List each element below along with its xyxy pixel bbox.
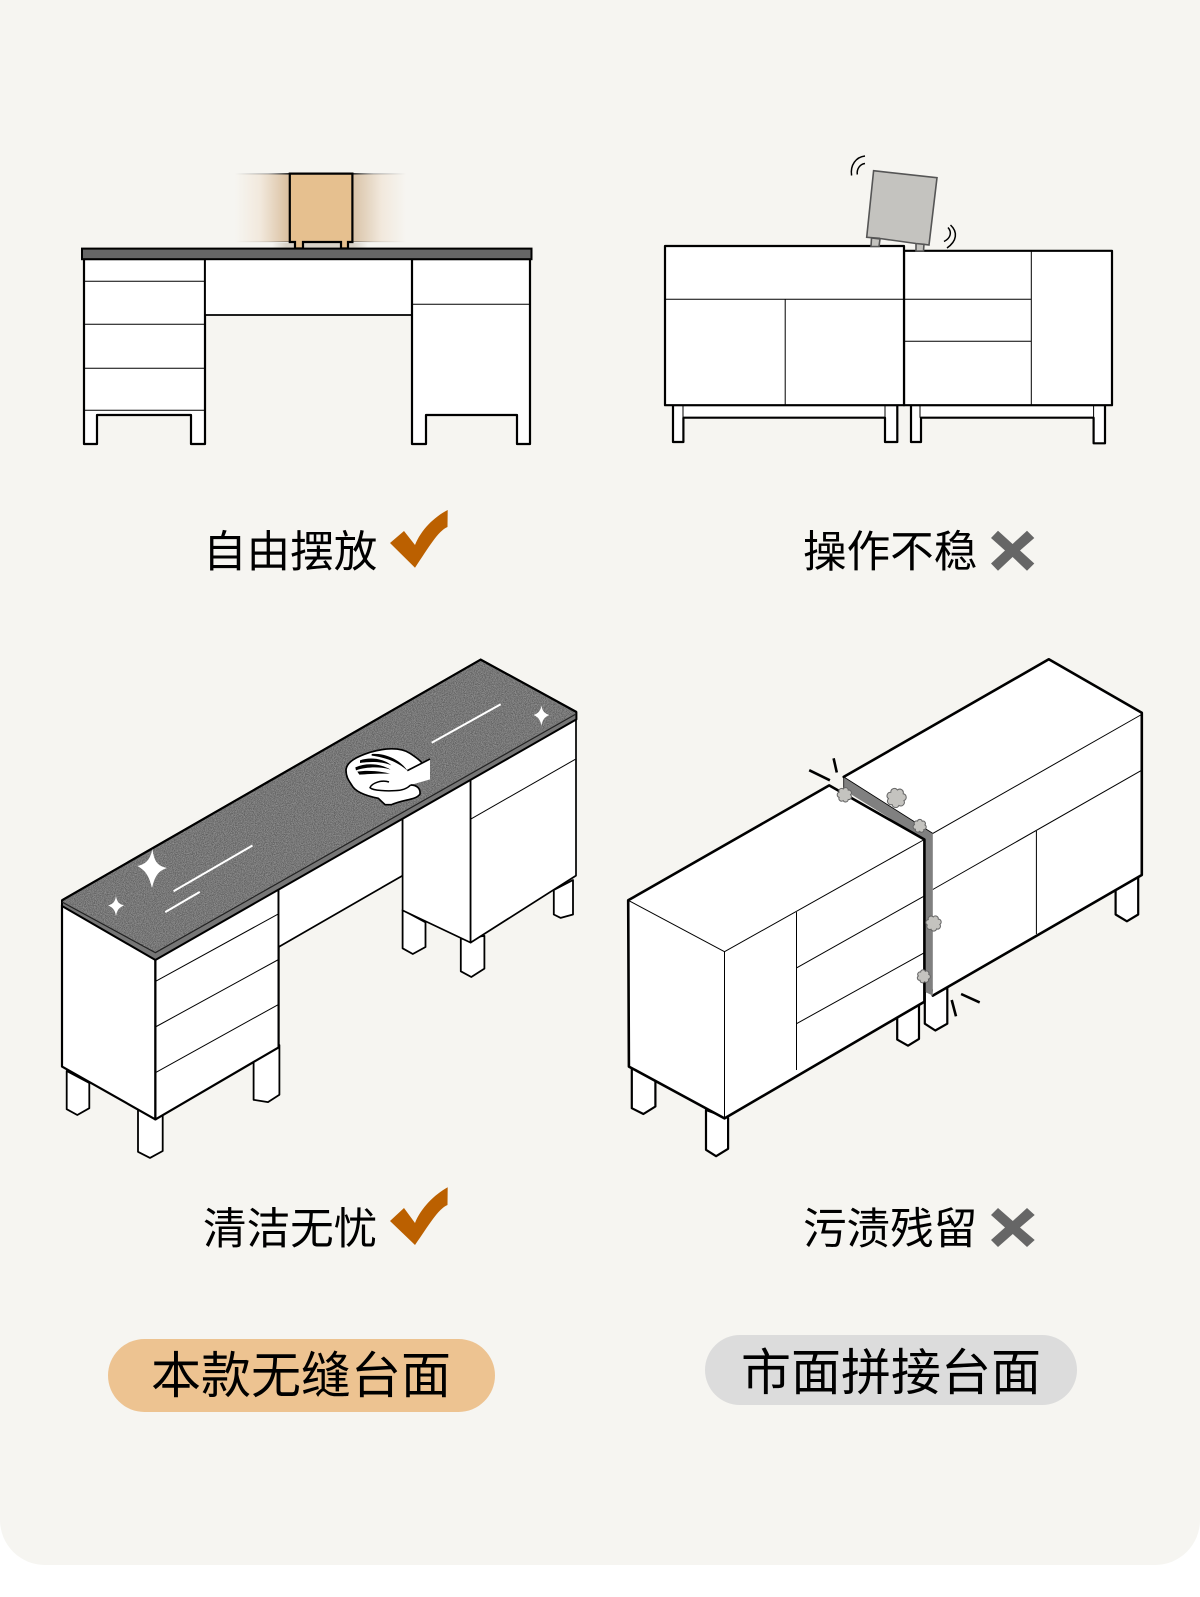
pill: spliced countertop: 市面拼接台面: [741, 1345, 1041, 1401]
panel: front view spliced cabinets with wobbling item: [665, 156, 1112, 443]
dirt blobs: [837, 786, 942, 985]
right cabinet side: [403, 776, 471, 943]
pill: seamless countertop: 本款无缝台面: [151, 1348, 451, 1404]
icon: wobble arcs left: [851, 156, 865, 176]
icon: grey cross: [991, 531, 1034, 571]
icon: grey cross: [991, 1208, 1035, 1247]
panel: isometric spliced cabinets: [628, 659, 1142, 1156]
icon: orange check: [390, 510, 448, 568]
right cabinet front: [471, 716, 576, 943]
right cabinet: [904, 251, 1112, 405]
right door cabinet: [412, 259, 530, 444]
left cabinet side: [62, 905, 155, 1119]
item: tan box on desk: [290, 174, 352, 248]
middle drawer: [205, 259, 412, 315]
cabinet legs: [632, 877, 1138, 1156]
pill: seamless countertop: [108, 1339, 495, 1412]
dark desktop slab: [82, 249, 532, 259]
label: unstable: 操作不稳: [803, 529, 977, 577]
sparkle small left: [108, 896, 124, 916]
label: stains remain: 污渍残留: [803, 1206, 977, 1254]
item glow: [235, 173, 406, 248]
front cabinet: [628, 785, 924, 1118]
panel: isometric seamless desk: [62, 660, 576, 1158]
panel: front view desk with freely placed item: [82, 173, 532, 444]
pill: spliced countertop: [705, 1335, 1077, 1405]
shine strokes: [165, 704, 501, 912]
legs and rail of left cabinet: [673, 405, 897, 442]
sparkle small right: [533, 706, 549, 726]
icon: wobble arcs right: [944, 225, 955, 248]
left cabinet front with drawers: [155, 888, 279, 1119]
left drawer cabinet: [84, 259, 205, 444]
grey seam gap: [844, 777, 933, 996]
icon: hand wiping with cloth: [346, 749, 430, 805]
left taller cabinet: [665, 246, 904, 405]
desk legs: [67, 880, 573, 1158]
label: free placement: 自由摆放: [203, 529, 377, 577]
dark countertop: [62, 660, 576, 960]
legs and rail of right cabinet: [911, 405, 1105, 443]
tick marks at seam bottom: [952, 994, 980, 1016]
back cabinet: [844, 659, 1142, 996]
label: easy cleaning: 清洁无忧: [203, 1206, 377, 1254]
sparkle large: [138, 849, 167, 888]
center drawer: [279, 818, 403, 947]
icon: orange check: [390, 1187, 448, 1245]
item: tilted grey box: [867, 171, 937, 251]
tick marks at seam top: [809, 758, 837, 780]
